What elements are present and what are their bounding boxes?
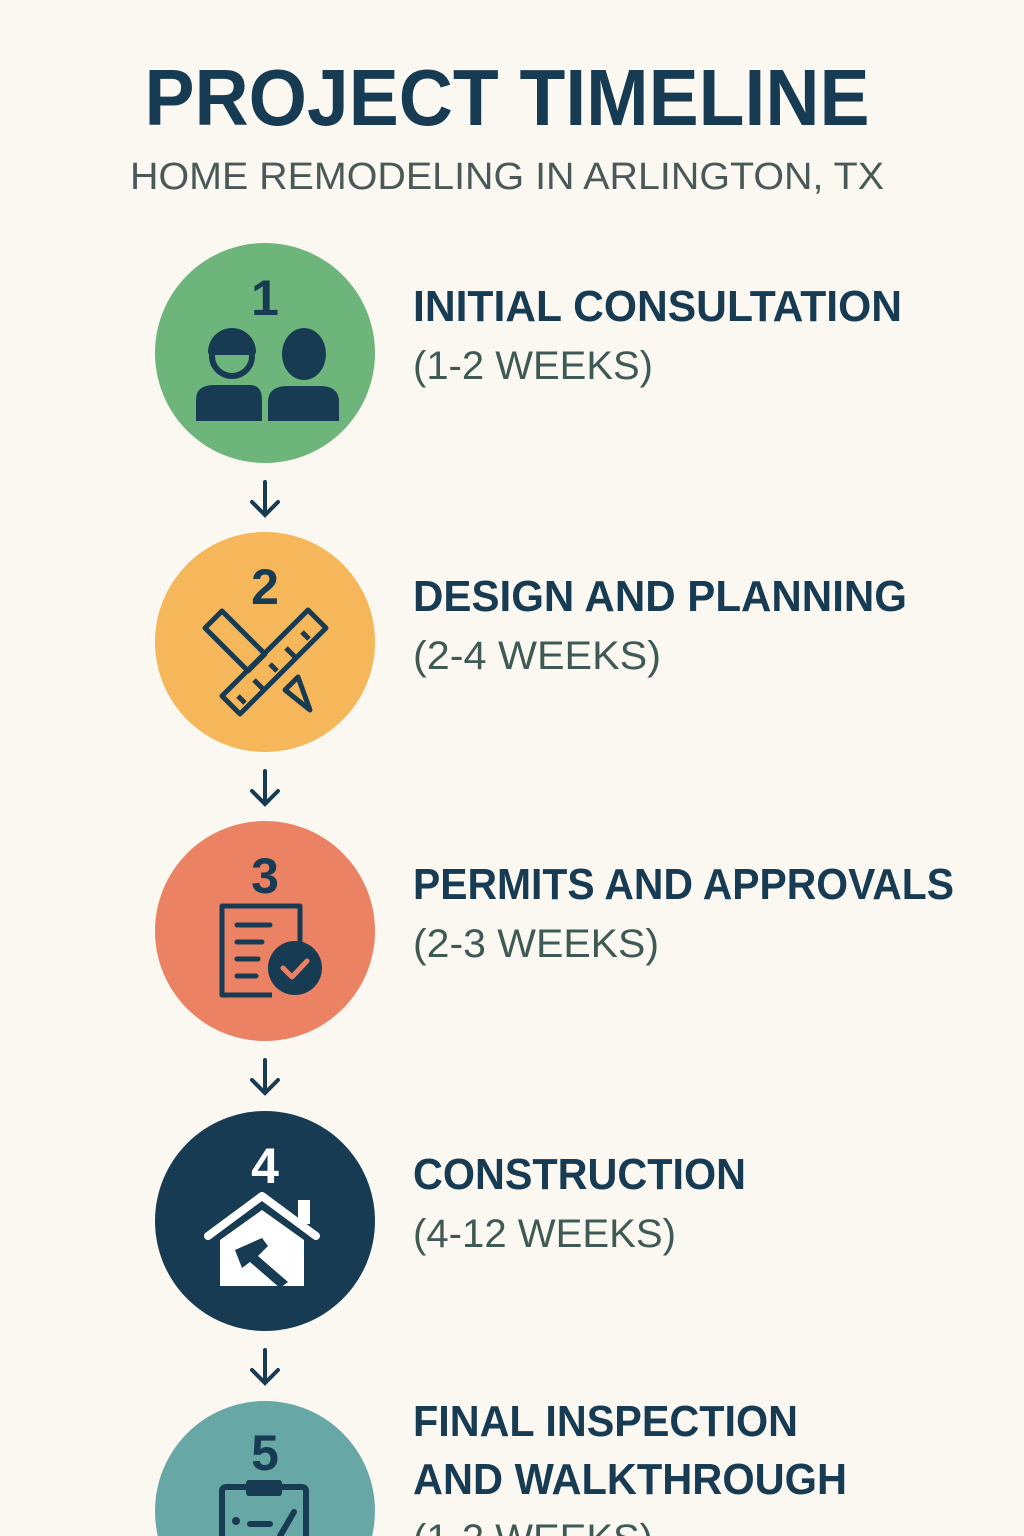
duration 4: (4-12 WEEKS) bbox=[413, 1212, 676, 1256]
circle 4 bbox=[155, 1111, 375, 1331]
heading 4: CONSTRUCTION bbox=[413, 1150, 746, 1199]
heading 5: FINAL INSPECTION bbox=[413, 1397, 798, 1446]
circle 4: 4 bbox=[251, 1138, 279, 1194]
icon: house with hammer bbox=[208, 1196, 316, 1288]
step 5: AND WALKTHROUGH bbox=[413, 1455, 847, 1504]
step 4 bbox=[155, 1111, 746, 1331]
step 1 bbox=[155, 243, 902, 463]
arrow 4 bbox=[252, 1350, 278, 1383]
arrow 1 bbox=[252, 482, 278, 515]
circle 2 bbox=[155, 532, 375, 752]
circle 3: 3 bbox=[251, 848, 279, 904]
title: PROJECT TIMELINE bbox=[144, 53, 870, 142]
step 5 bbox=[155, 1397, 847, 1536]
step 3 bbox=[155, 821, 954, 1041]
step 2 bbox=[155, 532, 907, 752]
circle 5 bbox=[155, 1401, 375, 1536]
circle 2: 2 bbox=[251, 559, 279, 615]
circle 1: 1 bbox=[251, 270, 279, 326]
heading 3: PERMITS AND APPROVALS bbox=[413, 860, 954, 909]
circle 1 bbox=[155, 243, 375, 463]
icon: approved document bbox=[222, 906, 322, 995]
circle 3 bbox=[155, 821, 375, 1041]
icon: people bbox=[196, 328, 339, 421]
arrow 3 bbox=[252, 1060, 278, 1093]
heading 1: INITIAL CONSULTATION bbox=[413, 282, 902, 331]
heading 2: DESIGN AND PLANNING bbox=[413, 572, 907, 621]
subtitle: HOME REMODELING IN ARLINGTON, TX bbox=[130, 156, 884, 198]
circle 5: 5 bbox=[251, 1425, 279, 1481]
arrow 2 bbox=[252, 771, 278, 804]
duration 3: (2-3 WEEKS) bbox=[413, 922, 659, 966]
icon: ruler and pencil bbox=[205, 610, 326, 714]
duration 1: (1-2 WEEKS) bbox=[413, 344, 653, 388]
duration 2: (2-4 WEEKS) bbox=[413, 634, 661, 678]
icon: clipboard bbox=[222, 1480, 306, 1536]
